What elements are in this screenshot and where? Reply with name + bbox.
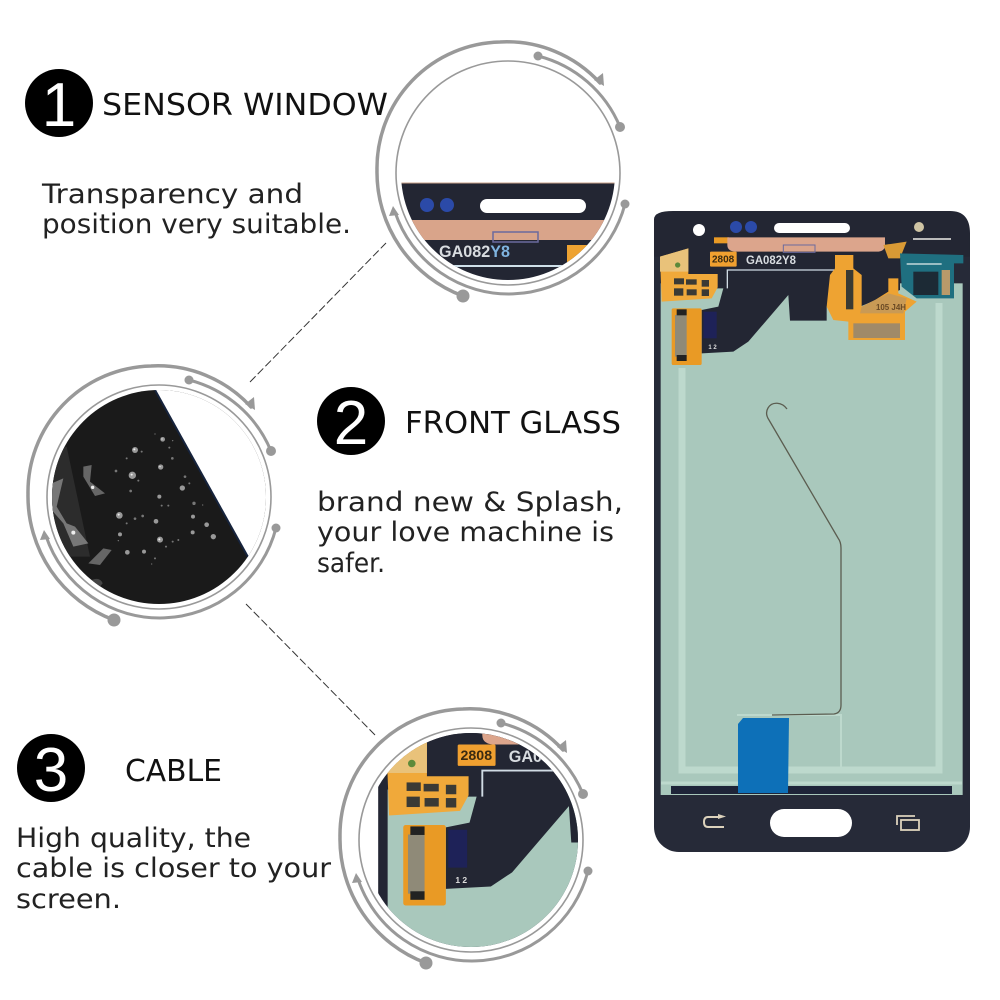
phone screen back and flex cables: 1 2	[708, 345, 717, 351]
section 1: sensor window heading	[25, 69, 388, 140]
section 3: cable heading: 3	[34, 736, 68, 805]
section 2: description text: safer.	[317, 548, 385, 579]
cable close-up photo: GA082Y8	[509, 747, 580, 766]
circle 1: sensor window magnifier	[377, 42, 630, 303]
section 3: description text: High quality, the	[16, 823, 251, 854]
front top details: sensors and earpiece	[693, 221, 951, 240]
section 1: description text: position very suitable.	[42, 209, 351, 240]
phone screen back and flex cables: 105 J4H	[876, 302, 906, 312]
section 2: front glass heading: 2	[334, 389, 368, 458]
section 3: description text: screen.	[16, 884, 121, 915]
cable close-up photo	[378, 733, 578, 947]
home button	[770, 809, 852, 837]
decorative rings and arrows	[28, 366, 280, 626]
section 2: description text	[317, 487, 623, 579]
blue tape	[738, 718, 789, 793]
section 1: description text: Transparency and	[41, 179, 303, 210]
circle 3: cable magnifier	[338, 707, 592, 970]
inner adhesive bands	[661, 303, 962, 783]
section 2: front glass heading	[317, 387, 621, 458]
cable close-up photo: 2808	[461, 748, 492, 764]
section 2: front glass heading: FRONT GLASS	[405, 406, 621, 441]
circle 2: front glass magnifier	[28, 366, 280, 626]
phone screen back and flex cables	[654, 211, 970, 795]
section 3: description text: cable is closer to your	[16, 853, 332, 884]
section 3: description text	[16, 823, 332, 915]
wire	[766, 403, 841, 715]
phone screen back and flex cables: 2808	[712, 255, 735, 266]
section 1: sensor window heading: SENSOR WINDOW	[102, 88, 388, 123]
section 2: description text: brand new & Splash,	[317, 487, 623, 518]
section 2: description text: your love machine is	[317, 517, 614, 548]
icon: recents button	[897, 816, 919, 830]
decorative rings and arrows	[377, 42, 630, 303]
section 1: description text	[41, 179, 351, 240]
water droplets photo	[50, 380, 270, 608]
section 3: cable heading: CABLE	[125, 754, 222, 789]
dashed connector lines	[246, 243, 386, 735]
sensor window photo: GA082Y8	[439, 242, 510, 261]
section 3: cable heading	[17, 734, 222, 805]
sensor window photo	[401, 182, 615, 280]
phone screen back and flex cables: GA082Y8	[746, 254, 796, 267]
cable close-up photo: 1 2	[455, 875, 467, 885]
decorative rings and arrows	[340, 709, 592, 970]
icon: back button	[704, 814, 726, 827]
phone LCD assembly	[654, 211, 970, 852]
bottom dark strip	[671, 786, 952, 794]
section 1: sensor window heading: 1	[42, 71, 76, 140]
